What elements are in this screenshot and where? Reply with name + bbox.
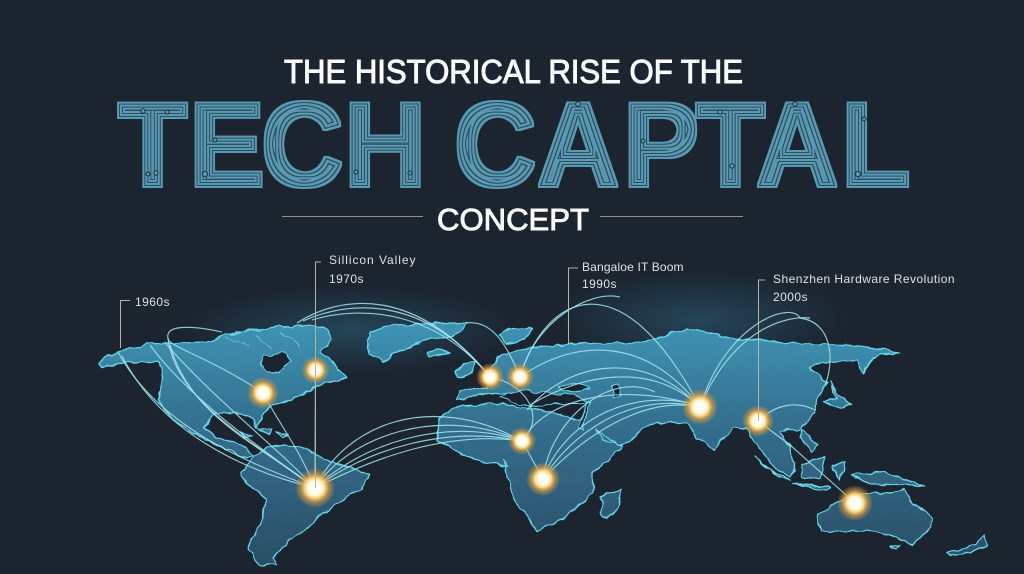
greenland xyxy=(367,323,467,362)
label: silicon valley 1970s xyxy=(316,253,416,488)
title: tech captal striped lettering: TECH CAPTAL xyxy=(0,77,911,212)
mediterranean and inland seas xyxy=(500,390,588,407)
southeast asia islands xyxy=(755,430,925,491)
label: bangalore it boom 1990s: Bangaloe IT Boom xyxy=(582,260,684,274)
new zealand xyxy=(947,535,987,556)
label: 1960s xyxy=(120,295,170,348)
label: bangalore it boom 1990s: 1990s xyxy=(582,277,617,291)
hudson bay xyxy=(260,353,292,374)
japan xyxy=(824,382,852,408)
label: shenzhen hardware revolution 2000s: 2000s xyxy=(773,290,808,304)
scandinavia xyxy=(500,328,532,345)
connection arcs xyxy=(118,296,855,503)
caribbean islands xyxy=(240,428,288,438)
tasmania xyxy=(890,546,900,550)
arctic channels xyxy=(225,330,300,348)
label: bangalore it boom 1990s xyxy=(568,260,684,345)
label: silicon valley 1970s: Sillicon Valley xyxy=(329,253,416,267)
location hubs xyxy=(247,356,873,521)
iceland xyxy=(427,349,449,356)
map glow xyxy=(180,270,850,375)
north america xyxy=(97,325,347,458)
label: shenzhen hardware revolution 2000s xyxy=(758,272,955,421)
divider lines and concept subtitle: CONCEPT xyxy=(437,202,589,237)
south america xyxy=(242,445,370,565)
label: silicon valley 1970s: 1970s xyxy=(329,272,364,286)
madagascar xyxy=(601,489,621,518)
afro-eurasia xyxy=(437,328,900,530)
british isles xyxy=(455,362,475,378)
label: 1960s: 1960s xyxy=(135,295,170,309)
australia xyxy=(818,490,932,545)
title: the historical rise of the: THE HISTORICAL RISE OF THE xyxy=(284,53,743,90)
world map xyxy=(97,323,987,565)
circuit trace details xyxy=(141,102,866,177)
label: shenzhen hardware revolution 2000s: Shenzhen Hardware Revolution xyxy=(773,272,955,286)
